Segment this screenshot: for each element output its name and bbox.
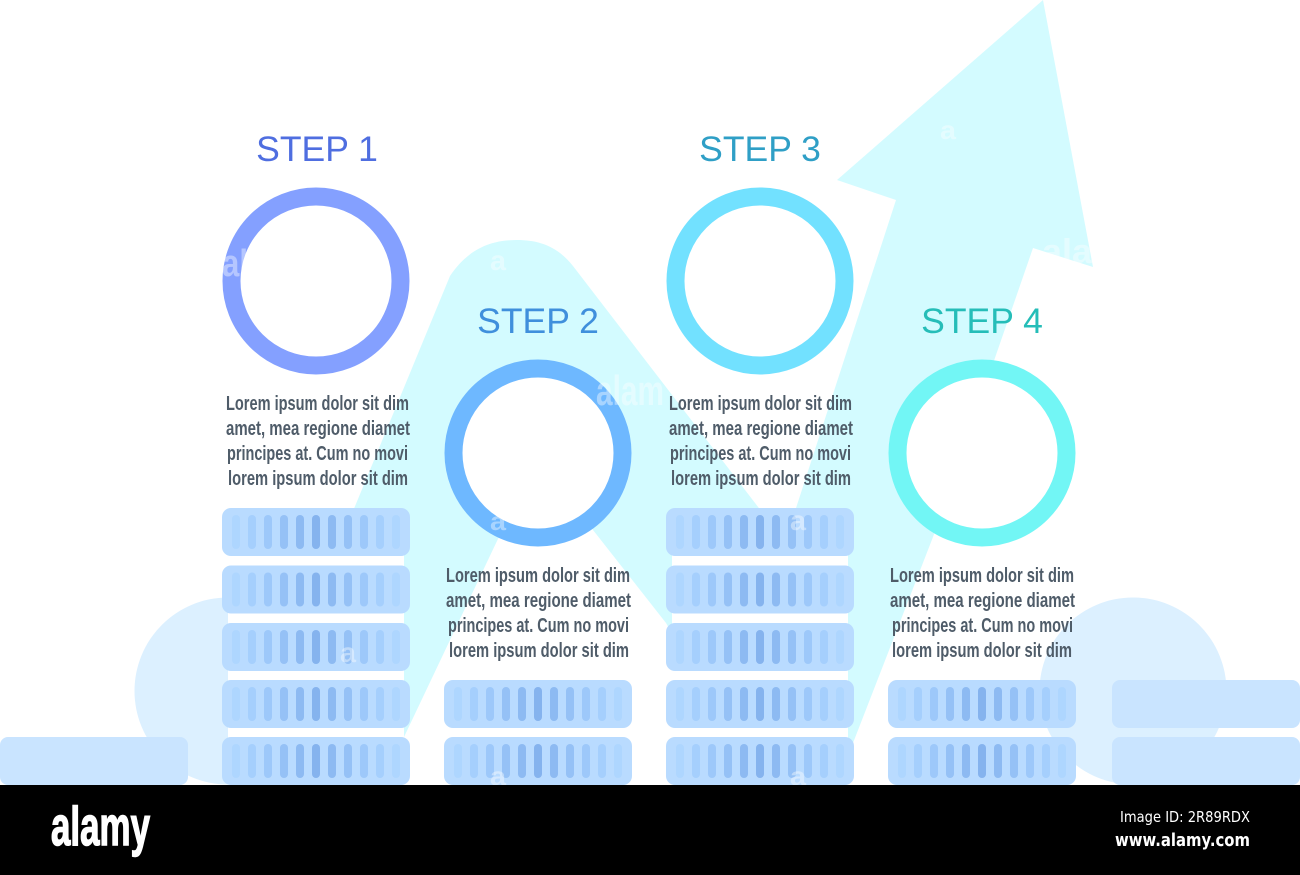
watermark fragments (222, 115, 1093, 791)
step 2 text: lorem ipsum dolor sit dim (449, 640, 629, 662)
step 4 text: lorem ipsum dolor sit dim (892, 640, 1072, 662)
step 2 coin stack (444, 680, 632, 785)
step 3 ring (676, 196, 844, 366)
step 2 text: Lorem ipsum dolor sit dim (446, 565, 630, 587)
step 4 text: Lorem ipsum dolor sit dim (890, 565, 1074, 587)
step 3 text: lorem ipsum dolor sit dim (671, 468, 851, 490)
step 1 text: lorem ipsum dolor sit dim (228, 468, 408, 490)
pale coin left (0, 737, 188, 785)
step 1 text: Lorem ipsum dolor sit dim (226, 393, 409, 415)
step 1 text: amet, mea regione diamet (226, 418, 410, 440)
step 1 ring (232, 196, 400, 366)
footer bar (0, 785, 1300, 875)
step 3 text: amet, mea regione diamet (669, 418, 853, 440)
step 3 column (666, 129, 854, 785)
step 1 column (222, 129, 410, 785)
image id: Image ID: 2R89RDX (1120, 808, 1250, 826)
step 2 heading: STEP 2 (477, 301, 599, 341)
step 2 ring (454, 368, 622, 538)
step 2 text: amet, mea regione diamet (446, 590, 631, 612)
watermark fragments: a (790, 761, 807, 791)
watermark fragments: al (222, 243, 248, 285)
step 4 ring (898, 368, 1066, 538)
step 3 coin stack (666, 508, 854, 785)
step 4 coin stack (888, 680, 1076, 785)
pale coin stack right (1112, 680, 1300, 785)
website: www.alamy.com (1115, 831, 1250, 851)
step 3 text: principes at. Cum no movi (670, 443, 851, 465)
step 3 text: Lorem ipsum dolor sit dim (669, 393, 852, 415)
watermark fragments: a (490, 245, 506, 276)
step 4 text (890, 565, 1075, 662)
watermark fragments: alam (596, 367, 664, 414)
step 4 text: principes at. Cum no movi (892, 615, 1073, 637)
step 3 text (669, 393, 853, 490)
watermark fragments: a (340, 637, 356, 668)
background circle left (134, 598, 322, 784)
watermark fragments: a (490, 506, 507, 536)
background zigzag arrow (240, 0, 1093, 785)
step 1 coin stack (222, 508, 410, 785)
step 2 text (446, 565, 631, 662)
step 4 column (888, 301, 1076, 785)
background circle right (1040, 598, 1226, 784)
step 2 column (444, 301, 632, 785)
step 4 heading: STEP 4 (921, 301, 1043, 341)
watermark fragments: a (490, 761, 507, 791)
step 3 heading: STEP 3 (699, 129, 821, 169)
watermark fragments: a (940, 115, 957, 145)
step 1 text: principes at. Cum no movi (227, 443, 408, 465)
alamy logo: alamy (51, 795, 150, 857)
step 1 heading: STEP 1 (256, 129, 378, 169)
watermark fragments: a (790, 505, 806, 536)
step 2 text: principes at. Cum no movi (448, 615, 629, 637)
step 1 text (226, 393, 410, 490)
step 4 text: amet, mea regione diamet (890, 590, 1075, 612)
watermark fragments: ala (1042, 233, 1093, 271)
